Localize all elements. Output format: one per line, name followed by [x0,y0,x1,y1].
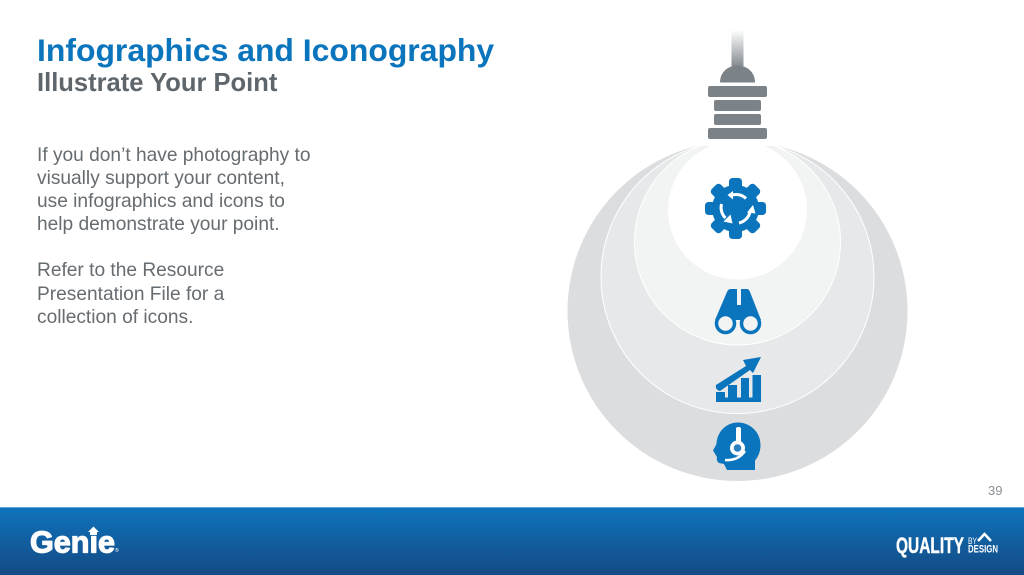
body text: help demonstrate your point. [37,214,280,235]
body text: visually support your content, [37,168,285,189]
logo: Quality by Design: QUALITY [896,533,964,558]
title: Infographics and Iconography [37,32,494,68]
icon: binoculars [715,289,761,332]
footer band [0,507,1024,575]
icon: support agent head [713,422,760,470]
body text: use infographics and icons to [37,191,285,212]
icon: gear with arrows [705,178,766,239]
subtitle: Illustrate Your Point [37,69,277,97]
logo: Quality by Design: BY [968,536,977,546]
logo: Quality by Design: DESIGN [968,544,998,556]
body text: Presentation File for a [37,284,224,305]
logo: Genie: Genie [30,524,115,560]
bulb circles [568,130,908,481]
body text: Refer to the Resource [37,260,224,281]
logo: Genie: ® [115,547,119,554]
body text: If you don’t have photography to [37,145,310,166]
page number: 39 [988,483,1002,498]
body text [37,145,310,328]
icon: growth chart [716,357,761,402]
body text: collection of icons. [37,307,193,328]
bulb socket [708,30,767,139]
